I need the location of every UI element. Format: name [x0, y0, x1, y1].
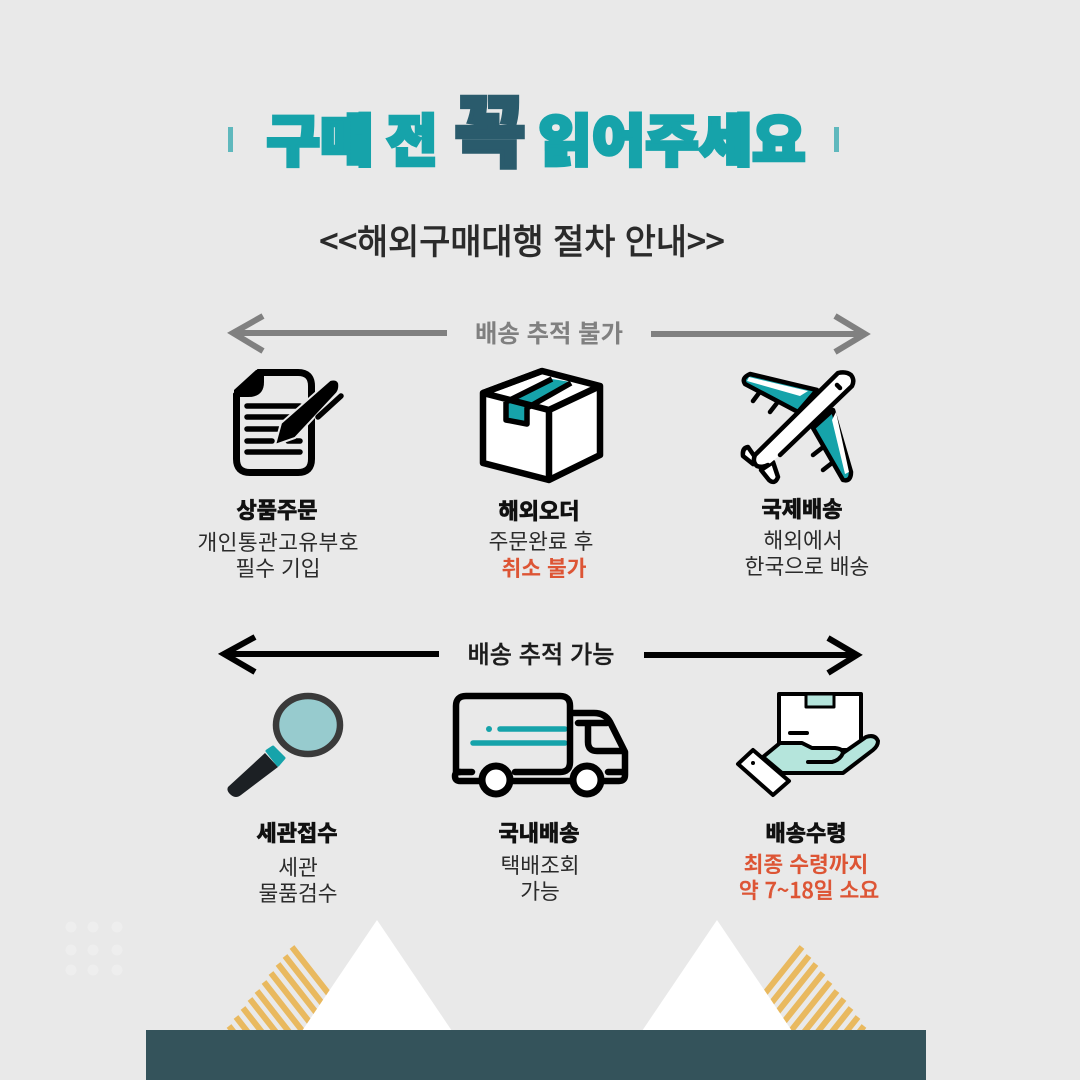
description: customs: 물품검수	[258, 882, 338, 906]
description: domestic delivery: 택배조회	[500, 854, 580, 878]
description: overseas order: 주문완료 후	[489, 530, 593, 554]
description: delivery received: 약 7~18일 소요	[739, 874, 879, 905]
decoration: right striped triangle	[762, 947, 864, 1076]
description: domestic delivery: 가능	[520, 880, 560, 904]
step: international shipping	[743, 372, 869, 579]
title: 꼭	[454, 89, 526, 177]
icon: truck	[455, 696, 625, 794]
step: overseas order	[483, 371, 600, 581]
description: domestic delivery	[500, 854, 580, 904]
description: customs: 세관	[278, 856, 318, 880]
title	[228, 89, 839, 177]
label: delivery received: 배송수령	[766, 821, 846, 846]
step: customs	[227, 696, 340, 906]
description: product order	[198, 531, 358, 581]
description: product order: 개인통관고유부호	[198, 531, 358, 555]
description: delivery received	[739, 848, 879, 905]
title: 읽어주세요	[538, 110, 806, 173]
arrow: tracking available	[224, 637, 857, 673]
description: overseas order	[489, 530, 593, 581]
subtitle: <<해외구매대행 절차 안내>>	[320, 214, 724, 265]
step: product order	[198, 370, 358, 581]
icon: airplane	[743, 372, 853, 482]
decoration: dot grid	[66, 922, 122, 976]
description: product order: 필수 기입	[235, 557, 321, 581]
footer bar	[146, 1030, 926, 1080]
arrow: tracking unavailable: 배송 추적 불가	[475, 320, 623, 348]
title: 구매	[266, 110, 374, 173]
description: delivery received: 최종 수령까지	[744, 848, 868, 879]
decoration: left white triangle	[302, 920, 452, 1031]
description: international shipping	[745, 529, 869, 579]
decoration: right white triangle	[642, 920, 792, 1031]
step: domestic delivery	[455, 696, 625, 904]
label: customs: 세관접수	[257, 821, 337, 846]
icon: document with pen	[234, 370, 341, 472]
label: overseas order: 해외오더	[499, 499, 579, 524]
icon: hand holding parcel	[738, 694, 878, 795]
description: customs	[258, 856, 338, 906]
description: overseas order: 취소 불가	[501, 557, 587, 581]
icon: magnifier	[227, 696, 340, 797]
label: product order: 상품주문	[237, 498, 317, 523]
title: 전	[386, 110, 438, 173]
description: international shipping: 한국으로 배송	[745, 555, 869, 579]
arrow: tracking unavailable	[233, 316, 865, 352]
label: international shipping: 국제배송	[762, 497, 842, 522]
icon: parcel box	[483, 371, 600, 480]
description: international shipping: 해외에서	[763, 529, 843, 553]
decoration: left striped triangle	[229, 947, 332, 1077]
label: domestic delivery: 국내배송	[499, 821, 579, 846]
step: delivery received	[738, 694, 879, 905]
arrow: tracking available: 배송 추적 가능	[468, 641, 614, 669]
